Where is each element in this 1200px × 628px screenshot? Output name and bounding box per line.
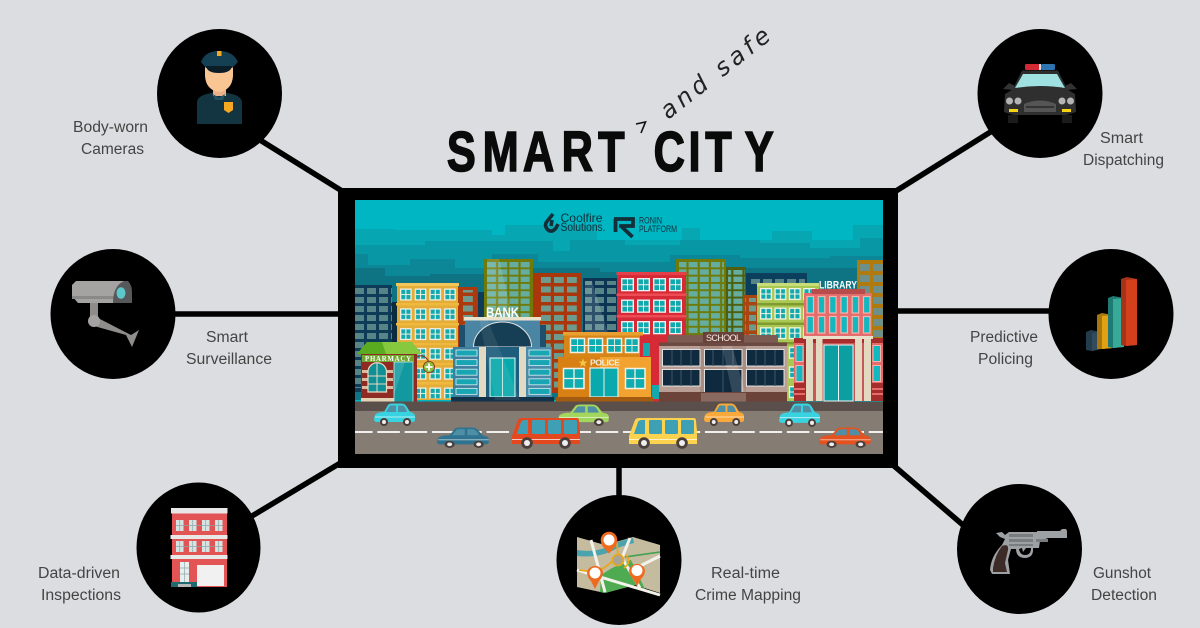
car: dark teal xyxy=(437,427,489,448)
node: data-driven inspections xyxy=(38,482,260,612)
circle xyxy=(50,249,176,379)
icon: red building xyxy=(170,508,228,587)
car: red right xyxy=(819,427,871,448)
label: Gunshot Detection: Detection xyxy=(1091,587,1157,604)
icon: police officer xyxy=(197,51,242,124)
circle xyxy=(1048,249,1174,379)
label: Smart Dispatching: Dispatching xyxy=(1083,152,1164,169)
label: Body-worn Cameras: Cameras xyxy=(81,141,144,158)
van: yellow xyxy=(629,418,697,449)
sky xyxy=(355,200,883,454)
label: Data-driven Inspections: Inspections xyxy=(41,587,121,604)
caret insert mark xyxy=(636,122,646,133)
icon: police car xyxy=(1003,64,1077,123)
pharmacy: PHARMACY xyxy=(365,356,411,363)
label: Gunshot Detection xyxy=(1091,565,1157,604)
label: Smart Surveillance: Surveillance xyxy=(186,351,272,368)
background buildings xyxy=(355,259,883,397)
label: Real-time Crime Mapping: Crime Mapping xyxy=(695,587,801,604)
connector lines xyxy=(175,131,1050,525)
label: Smart Dispatching: Smart xyxy=(1100,130,1144,147)
icon: revolver xyxy=(990,529,1067,574)
car: light green xyxy=(558,404,609,426)
node: smart dispatching xyxy=(978,29,1164,169)
car: orange xyxy=(704,404,744,426)
green apartment building xyxy=(757,283,819,401)
title: SMART CITY: SMARTCITY xyxy=(447,119,774,183)
label: Body-worn Cameras: Body-worn xyxy=(73,119,148,136)
bank xyxy=(451,305,554,402)
skyline layers xyxy=(355,225,883,400)
circle xyxy=(957,484,1082,614)
car: cyan right xyxy=(779,404,820,427)
node: smart surveillance xyxy=(50,249,272,379)
label: Data-driven Inspections xyxy=(38,565,121,604)
label: Smart Surveillance: Smart xyxy=(206,329,249,346)
label: Real-time Crime Mapping xyxy=(695,565,801,604)
label: Gunshot Detection: Gunshot xyxy=(1093,565,1152,582)
pharmacy xyxy=(357,342,435,402)
label: Data-driven Inspections: Data-driven xyxy=(38,565,120,582)
node: gunshot detection xyxy=(957,484,1157,614)
car: cyan left xyxy=(374,404,415,426)
title xyxy=(447,21,776,183)
central city panel xyxy=(338,188,898,468)
node: body-worn cameras xyxy=(73,29,282,158)
label: Body-worn Cameras xyxy=(73,119,148,158)
label: Predictive Policing: Policing xyxy=(978,351,1033,368)
library xyxy=(794,280,883,401)
circle xyxy=(978,29,1102,158)
sign: POLICE: POLICE xyxy=(590,358,620,368)
logo: Coolfire Solutions: Solutions. xyxy=(560,220,606,234)
icon: security camera xyxy=(72,281,139,347)
handwritten: and safe: and safe xyxy=(654,21,776,125)
sign: LIBRARY: LIBRARY xyxy=(819,280,858,292)
sign: SCHOOL: SCHOOL xyxy=(706,333,741,343)
yellow apartment building xyxy=(396,283,459,400)
circle xyxy=(157,29,282,158)
circle xyxy=(556,495,682,625)
label: Smart Surveillance xyxy=(186,329,272,368)
sidewalk and road xyxy=(355,402,883,454)
logo: Ronin Platform xyxy=(614,216,677,237)
label: Predictive Policing: Predictive xyxy=(970,329,1038,346)
police station xyxy=(556,332,653,402)
logo: Ronin Platform: PLATFORM xyxy=(639,224,677,235)
logo: Coolfire Solutions xyxy=(546,211,606,234)
icon: map with pins xyxy=(577,532,660,595)
van: red xyxy=(512,418,580,449)
node: predictive policing xyxy=(970,249,1174,379)
circle xyxy=(136,482,260,612)
label: Predictive Policing xyxy=(970,329,1038,368)
school xyxy=(659,332,787,402)
logo: Ronin Platform: RONIN xyxy=(639,216,662,226)
node: real-time crime mapping xyxy=(556,495,801,625)
label: Smart Dispatching xyxy=(1083,130,1164,169)
panel frame xyxy=(338,188,898,468)
logo: Coolfire Solutions: Coolfire xyxy=(560,211,603,225)
label: Real-time Crime Mapping: Real-time xyxy=(711,565,780,582)
red apartment building xyxy=(616,272,686,402)
sign: BANK: BANK xyxy=(486,305,519,320)
icon: bar chart xyxy=(1086,277,1137,351)
